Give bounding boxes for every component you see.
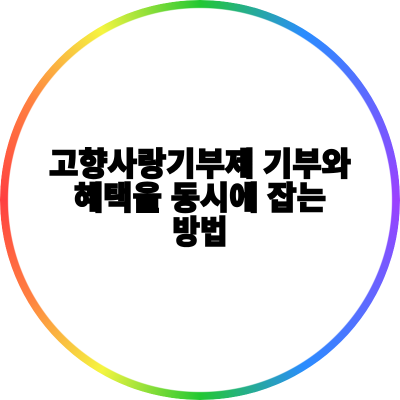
title: 혜택을 동시에 잡는	[74, 180, 326, 216]
title: 고향사랑기부제 기부와	[49, 146, 351, 182]
title: 방법	[172, 214, 228, 250]
